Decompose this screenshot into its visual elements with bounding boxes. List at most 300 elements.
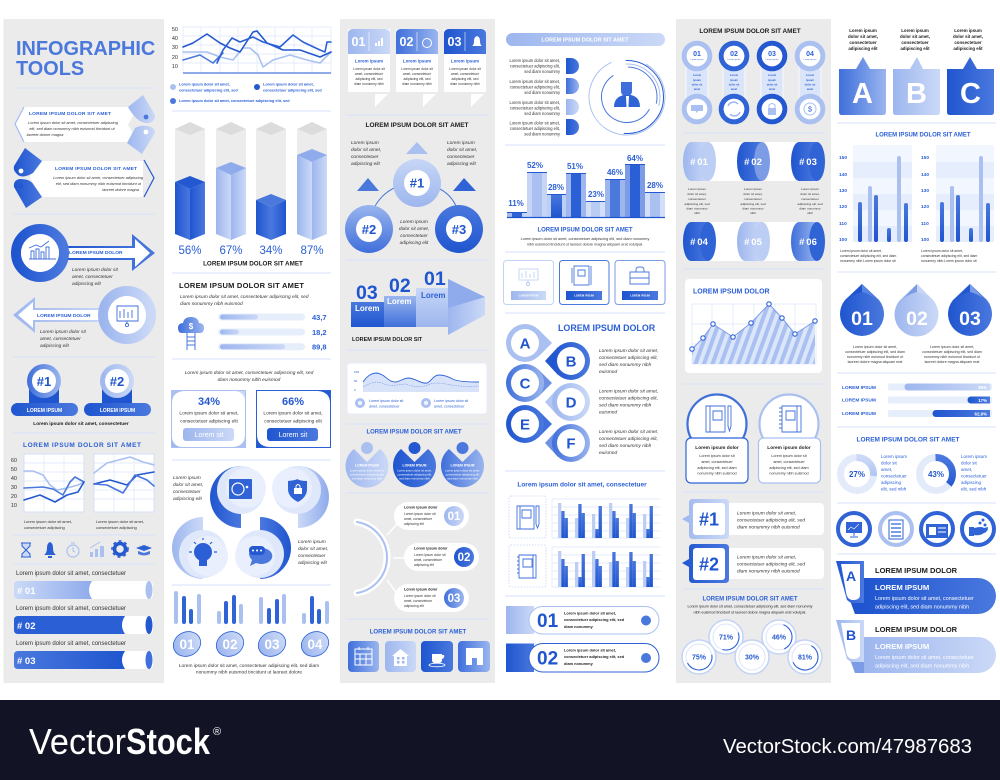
cylinder labels: consectetuer xyxy=(744,197,762,201)
lettered droplets: consectetuer adipiscing elit, xyxy=(599,396,658,402)
numbered note cards: Lorem ipsum dolor sit xyxy=(401,67,433,71)
cylinder labels: diam nonummy xyxy=(799,206,821,210)
badges #1 #2: Lorem ipsum dolor sit amet, consectetuer xyxy=(33,421,129,427)
progress bars: # 01 xyxy=(17,586,36,597)
donut charts: 43% xyxy=(928,470,944,479)
lettered droplets: F xyxy=(566,436,576,452)
arrow panel 2 with tags: Lorem ipsum dolor sit amet, consectetuer adipiscing xyxy=(53,175,144,180)
cylinder labels: nibh xyxy=(694,211,700,215)
lettered droplets: euismod xyxy=(599,369,617,375)
three icon boxes: LOREM IPSUM xyxy=(630,294,651,298)
stepped arrow: Lorem xyxy=(355,304,379,313)
title: INFOGRAPHIC xyxy=(16,38,155,60)
numbered note rows: consectetuer adipiscing elit, sed xyxy=(737,518,805,524)
panel: person arcs with text list: sed diam nonummy xyxy=(524,111,561,116)
ABC blocks: A xyxy=(852,78,873,110)
notched circles: Lorem ipsum dolor sit amet, xyxy=(350,468,384,472)
arc with three pills: adipiscing elit xyxy=(404,522,424,526)
notched circles: consectetuer adipiscing elit, xyxy=(397,472,432,476)
arc with three pills: Lorem ipsum dolor sit xyxy=(404,594,436,598)
notched circles: sed diam nonummy nibh xyxy=(352,476,383,480)
capsule pairs: dolor sit xyxy=(805,82,815,86)
numbered capsule rows: consectetuer adipiscing elit, sed xyxy=(564,654,625,659)
ribbon banner A: LOREM IPSUM xyxy=(875,583,929,592)
circle triad diagram: Lorem ipsum xyxy=(447,140,475,146)
panel: person arcs with text list: consectetuer adipiscing elit, xyxy=(510,64,560,68)
numbered note rows: #1 xyxy=(699,510,719,530)
double bar chart: 100 xyxy=(921,237,929,243)
progress bars: Lorem ipsum dolor sit amet, consectetuer xyxy=(16,571,126,577)
notebook domes: Lorem ipsum dolor xyxy=(695,445,739,451)
left line charts: Lorem ipsum dolor sit amet, xyxy=(96,519,144,524)
donut charts: elit, sed nibh xyxy=(881,486,907,492)
numbered note rows: Lorem ipsum dolor sit amet, xyxy=(737,554,796,560)
capsule pairs: $ xyxy=(808,106,812,114)
arrow panel 1 with tags: elit, sed diam nonummy nibh euismod tincidunt ut xyxy=(29,126,116,131)
3D bar chart xyxy=(175,122,327,268)
ABC blocks: adipiscing elit xyxy=(953,46,983,51)
icon row xyxy=(21,541,152,558)
numbered drops: consectetuer adipiscing elit, sed diam xyxy=(845,350,905,354)
icon tiles: LOREM IPSUM DOLOR SIT AMET xyxy=(370,628,467,636)
cylinder labels: # 03 xyxy=(799,157,817,168)
progress bars xyxy=(14,571,153,669)
numbered drops: nonummy nibh euismod tincidunt ut xyxy=(847,355,903,359)
bar groups with numbered ovals: Lorem ipsum dolor sit amet, consectetuer adipiscing elit, sed diam xyxy=(179,663,319,669)
capsule pairs: 01 xyxy=(693,51,701,58)
middle bar chart xyxy=(507,154,665,246)
numbered capsule rows: Lorem ipsum dolor sit amet, xyxy=(564,610,616,616)
lettered droplets: euismod xyxy=(599,410,617,416)
left line charts: 20 xyxy=(11,494,17,500)
panel: area chart card: 0 xyxy=(354,388,356,392)
horizontal percent bars: 62,9% xyxy=(975,412,987,416)
lettered droplets: E xyxy=(520,416,530,434)
capsule pairs: amet xyxy=(694,87,700,91)
left line charts: Lorem ipsum dolor sit amet, xyxy=(24,519,72,524)
lettered droplets: sed diam nonummy nibh xyxy=(599,402,652,408)
donut charts: dolor sit xyxy=(961,460,978,466)
double bar chart: consectetuer adipiscing elit, sed diam xyxy=(921,254,978,258)
top line chart: 40 xyxy=(172,36,178,42)
ribbon banner A: Lorem ipsum dolor sit amet, consectetuer xyxy=(875,596,974,602)
panel: two percent cards: consectetuer adipiscing elit xyxy=(180,418,238,424)
notched circles: Lorem ipsum dolor sit amet, xyxy=(397,468,432,472)
circle triad diagram: adipiscing elit xyxy=(400,240,429,246)
notched circles: consectetuer adipiscing elit, xyxy=(445,472,480,476)
title: TOOLS xyxy=(16,58,84,80)
double bar chart: 120 xyxy=(839,204,847,210)
badges #1 #2: #1 xyxy=(37,374,51,389)
capsule pairs: ipsum xyxy=(768,78,777,82)
numbered drops: 03 xyxy=(959,308,981,330)
arc with three pills: 02 xyxy=(458,552,470,564)
donut charts xyxy=(840,436,987,492)
percent rings: nibh euismod tincidunt ut laoreet dolore magna aliquam erat volutpat. xyxy=(694,610,806,614)
icon: safe xyxy=(229,479,252,499)
notched circles: sed diam nonummy nibh xyxy=(399,476,430,480)
notched circles xyxy=(345,430,484,488)
panel: person arcs with text list: Lorem ipsum dolor sit amet, xyxy=(509,58,560,63)
arrow graphic left with board icon: LOREM IPSUM DOLOR xyxy=(37,313,91,319)
numbered drops: laoreet dolore magna aliquam erat xyxy=(925,360,979,364)
notched circles: sed diam nonummy nibh xyxy=(447,476,478,480)
arrow graphic right with chart icon: adipiscing elit xyxy=(72,281,101,287)
capsule pairs: Lorem xyxy=(693,73,702,77)
icon: light bulb xyxy=(189,538,217,566)
lettered droplets: B xyxy=(566,354,577,370)
title xyxy=(16,38,155,80)
notebook domes: Lorem ipsum dolor xyxy=(767,445,811,451)
numbered note cards: adipiscing elit, sed xyxy=(404,77,431,81)
notebook domes: amet, consectetuer xyxy=(701,460,733,464)
donut charts: consectetuer xyxy=(881,474,907,478)
circle triad diagram: #2 xyxy=(362,222,376,237)
notebook bar charts xyxy=(509,482,660,587)
numbered note cards: amet, consectetuer xyxy=(355,72,384,76)
middle bar chart: LOREM IPSUM DOLOR SIT AMET xyxy=(537,228,633,234)
double bar chart: nonummy nibh.Lorem ipsum dolor sit xyxy=(840,259,896,263)
capsule pairs: ipsum xyxy=(730,78,739,82)
panel: area chart card: 50 xyxy=(354,379,358,383)
ABC blocks: C xyxy=(960,78,981,110)
lettered droplets: sed diam nonummy nibh xyxy=(599,443,652,449)
numbered note rows: diam nonummy nibh euismod xyxy=(737,568,800,574)
panel: four crescent circles: Lorem ipsum xyxy=(173,475,201,481)
cylinder labels: # 02 xyxy=(744,157,762,168)
ribbon banner A xyxy=(836,561,996,614)
panel: two percent cards: Lorem ipsum dolor sit amet, xyxy=(263,410,323,416)
circle triad diagram: consectetuer xyxy=(400,233,428,239)
3D bar chart: 56% xyxy=(178,245,202,257)
arrow panel 1 with tags xyxy=(15,95,155,154)
panel: four crescent circles: consectetuer xyxy=(298,553,326,559)
horizontal percent bars xyxy=(842,384,992,417)
ribbon banner A: adipiscing elit, sed diam nonummy nibh xyxy=(875,604,969,610)
bar groups with numbered ovals: 01 xyxy=(179,637,195,652)
capsule pairs: ipsum xyxy=(693,78,702,82)
donut charts: dolor sit xyxy=(881,460,898,466)
ribbon banner B: adipiscing elit, sed diam nonummy nibh xyxy=(875,664,969,670)
percent rings: LOREM IPSUM DOLOR SIT AMET xyxy=(702,596,798,602)
panel: two percent cards: Lorem ipsum dolor sit amet, xyxy=(179,410,239,416)
circle triad diagram: #1 xyxy=(410,176,424,190)
arc with three pills: Lorem ipsum dolor xyxy=(404,588,438,592)
numbered note cards: Lorem ipsum xyxy=(403,58,431,64)
double bar chart: 110 xyxy=(921,221,929,227)
double bar chart: 140 xyxy=(839,172,847,178)
capsule pairs: dolor sit xyxy=(692,82,702,86)
capsule pairs: 02 xyxy=(730,51,738,58)
numbered drops: 02 xyxy=(906,308,928,330)
arc with three pills: 01 xyxy=(448,511,461,523)
middle bar chart: 11% xyxy=(508,199,524,208)
double bar chart: 100 xyxy=(839,237,847,243)
numbered note rows: consectetuer adipiscing elit, sed xyxy=(737,562,805,568)
numbered drops: Lorem ipsum dolor sit amet, xyxy=(853,345,897,349)
numbered capsule rows: diam nonummy xyxy=(564,661,594,666)
percent rings: 46% xyxy=(772,634,787,642)
cylinder labels: diam nonummy xyxy=(742,206,764,210)
arrow panel 2 with tags: elit, sed diam nonummy nibh euismod tincidunt ut xyxy=(56,181,142,186)
panel: area chart card xyxy=(347,363,487,414)
notebook domes xyxy=(686,394,820,483)
percent rings: 81% xyxy=(798,654,813,662)
heading pill: LOREM IPSUM DOLOR SIT AMET xyxy=(541,38,629,44)
progress bars: # 03 xyxy=(17,656,36,667)
double bar chart: consectetuer adipiscing elit, sed diam xyxy=(840,254,897,258)
panel: area chart card: amet, consectetuer xyxy=(434,404,465,408)
middle bar chart: 28% xyxy=(548,183,564,192)
three icon boxes xyxy=(504,260,665,304)
left line charts: consectetuer adipiscing xyxy=(96,525,137,530)
notebook domes: Lorem ipsum dolor sit xyxy=(771,454,807,458)
progress bars: # 02 xyxy=(17,621,36,632)
donut charts: adipiscing xyxy=(961,480,982,485)
capsule pairs: Lorem ipsum xyxy=(804,58,816,61)
arc with three pills: amet, consectetuer xyxy=(404,599,433,603)
arc with three pills: adipiscing elit xyxy=(404,604,424,608)
icon: cloud with ladder xyxy=(178,317,204,350)
capsule pairs: dolor sit xyxy=(767,82,777,86)
percent rings xyxy=(682,596,823,675)
lettered droplets: Lorem ipsum dolor sit amet, xyxy=(599,429,658,435)
circle triad diagram: Lorem ipsum xyxy=(400,219,428,225)
stepped arrow: Lorem xyxy=(421,291,445,300)
numbered note rows: #2 xyxy=(699,554,719,574)
arc with three pills: Lorem ipsum dolor xyxy=(404,506,438,510)
arrow graphic right with chart icon: amet, consectetuer xyxy=(72,274,113,280)
numbered note cards: Lorem ipsum dolor sit xyxy=(353,67,385,71)
notched circles: LOREM IPSUM xyxy=(451,464,475,468)
footer watermark bar: VectorStock.com/47987683 xyxy=(723,736,972,758)
double bar chart: nonummy nibh.Lorem ipsum dolor sit xyxy=(921,259,977,263)
left line charts: consectetuer adipiscing xyxy=(24,525,65,530)
horizontal percent bars: LOREM IPSUM xyxy=(842,411,876,417)
notebook domes: Lorem ipsum dolor sit xyxy=(699,454,735,458)
footer watermark bar: Vector xyxy=(29,721,126,762)
donut charts: 27% xyxy=(849,470,865,479)
ribbon banner B xyxy=(836,620,996,673)
panel: four crescent circles xyxy=(172,466,329,579)
panel: hatched area chart xyxy=(685,279,822,373)
cylinder labels: dolor sit amet, xyxy=(687,192,707,196)
top line chart: 50 xyxy=(172,27,178,33)
panel: cloud progress: 43,7 xyxy=(312,313,327,322)
panel: person arcs with text list: sed diam nonummy xyxy=(524,90,561,95)
top line chart: Lorem ipsum dolor sit amet, consectetuer adipiscing elit, sed xyxy=(179,99,290,103)
numbered drops: nonummy nibh euismod tincidunt ut xyxy=(924,355,980,359)
panel: area chart card: 100 xyxy=(354,370,359,374)
icon: cloud with ladder: $ xyxy=(189,322,194,331)
capsule pairs: ipsum xyxy=(806,78,815,82)
left line charts: 50 xyxy=(11,467,17,473)
arrow panel 1 with tags: laoreet dolore magna xyxy=(27,132,64,137)
lettered droplets: consectetuer adipiscing elit, xyxy=(599,355,658,361)
lettered droplets: A xyxy=(520,336,531,352)
cylinder labels: consectetuer xyxy=(688,197,706,201)
numbered note cards: Lorem ipsum xyxy=(355,58,383,64)
numbered capsule rows: 02 xyxy=(537,648,558,670)
capsule pairs xyxy=(684,28,823,122)
numbered note cards: amet, consectetuer xyxy=(451,72,480,76)
arrow panel 2 with tags: laoreet dolore magna xyxy=(102,187,140,192)
top line chart: 20 xyxy=(172,55,178,61)
circle triad diagram: dolor sit amet, xyxy=(399,226,429,232)
top line chart: Lorem ipsum dolor sit amet, xyxy=(179,82,230,86)
left line charts: 60 xyxy=(11,458,17,464)
bar groups with numbered ovals: nonummy nibh euismod tincidunt ut laoreet dolore xyxy=(196,670,302,676)
notched circles: LOREM IPSUM xyxy=(403,464,427,468)
lettered droplets: consectetuer adipiscing elit, xyxy=(599,436,658,442)
cylinder labels: adipiscing elit, sed xyxy=(740,202,766,206)
middle bar chart: 64% xyxy=(627,154,643,163)
icon: person xyxy=(614,82,640,107)
3D bar chart: 34% xyxy=(259,245,283,257)
cylinder labels: Lorem ipsum xyxy=(744,187,762,191)
ABC blocks: Lorem ipsum xyxy=(954,28,982,33)
bar groups with numbered ovals: 03 xyxy=(264,637,280,652)
panel: four crescent circles: adipiscing elit xyxy=(173,496,202,502)
panel: cloud progress xyxy=(178,281,327,352)
lettered droplets: C xyxy=(520,376,531,392)
cylinder labels: # 01 xyxy=(690,157,709,168)
panel: person arcs with text list: Lorem ipsum dolor sit amet, xyxy=(509,100,560,105)
numbered note rows xyxy=(682,499,824,583)
cylinder labels: adipiscing elit, sed xyxy=(684,202,710,206)
numbered note cards: adipiscing elit, sed xyxy=(452,77,479,81)
capsule pairs: 03 xyxy=(768,51,776,58)
icon: chat bubbles xyxy=(249,546,272,566)
ribbon banner A: LOREM IPSUM DOLOR xyxy=(875,566,958,575)
panel: person arcs with text list: consectetuer adipiscing elit, xyxy=(510,106,560,110)
bar groups with numbered ovals: 02 xyxy=(222,637,238,652)
ABC blocks: Lorem ipsum xyxy=(849,28,877,33)
middle bar chart: 52% xyxy=(527,161,543,170)
lettered droplets: D xyxy=(566,394,577,412)
circle triad diagram: consectetuer xyxy=(351,154,379,160)
double bar chart xyxy=(839,132,994,263)
panel: two percent cards: 66% xyxy=(282,396,304,408)
circle triad diagram: #3 xyxy=(452,222,466,237)
3D bar chart: LOREM IPSUM DOLOR SIT AMET xyxy=(203,260,303,268)
ABC blocks: Lorem ipsum xyxy=(901,28,929,33)
stepped arrow: LOREM IPSUM DOLOR SIT xyxy=(352,337,423,343)
numbered note cards: 01 xyxy=(352,35,365,49)
notebook domes: nonummy nibh euismod xyxy=(697,472,737,476)
middle bar chart: nibh euismod tincidunt ut laoreet dolore magna aliquam erat volutpat. xyxy=(527,242,643,246)
top line chart: consectetuer adipiscing elit, sed xyxy=(179,88,238,92)
arc with three pills: Lorem ipsum dolor sit xyxy=(404,512,436,516)
ABC blocks: consectetuer xyxy=(849,40,877,45)
panel: four crescent circles: consectetuer xyxy=(173,489,201,495)
panel: person arcs with text list: Lorem ipsum dolor sit amet, xyxy=(509,79,560,84)
circle triad diagram: adipiscing elit xyxy=(351,161,380,167)
ABC blocks: dolor sit amet, xyxy=(900,34,930,39)
three icon boxes: LOREM IPSUM xyxy=(574,294,595,298)
ABC blocks: dolor sit amet, xyxy=(848,34,878,39)
double bar chart: 120 xyxy=(921,204,929,210)
lettered droplets: LOREM IPSUM DOLOR xyxy=(558,323,656,333)
ABC blocks: adipiscing elit xyxy=(848,46,878,51)
arrow graphic left with board icon: Lorem ipsum dolor sit xyxy=(40,329,87,335)
notched circles: consectetuer adipiscing elit, xyxy=(350,472,384,476)
donut charts: adipiscing xyxy=(881,480,902,485)
panel: cloud progress: diam nonummy nibh euismod xyxy=(180,301,243,307)
cylinder labels: nibh xyxy=(750,211,756,215)
middle bar chart: 23% xyxy=(588,190,604,199)
left line charts: 30 xyxy=(11,485,17,491)
panel: two percent cards: Lorem sit xyxy=(279,432,307,439)
notebook domes: nonummy nibh euismod xyxy=(769,472,809,476)
ribbon banner B: B xyxy=(846,627,856,643)
lettered droplets: Lorem ipsum dolor sit amet, xyxy=(599,388,658,394)
capsule pairs: Lorem xyxy=(806,73,815,77)
notebook domes: adipiscing elit, sed diam xyxy=(697,466,737,470)
ABC blocks: B xyxy=(906,78,927,110)
arrow graphic right with chart icon xyxy=(16,229,155,287)
donut charts: amet, xyxy=(961,467,972,472)
cylinder labels: diam nonummy xyxy=(686,206,708,210)
stepped arrow: 03 xyxy=(356,282,378,304)
donut charts: elit, sed nibh xyxy=(961,486,987,492)
capsule pairs: LOREM IPSUM DOLOR SIT AMET xyxy=(699,28,801,35)
circle triad diagram: dolor sit amet, xyxy=(447,147,477,153)
panel: two percent cards: consectetuer adipiscing elit xyxy=(264,418,322,424)
panel: cloud progress: Lorem ipsum dolor sit amet, consectetuer adipiscing elit, sed xyxy=(180,294,309,300)
panel: two percent cards: 34% xyxy=(198,396,220,408)
panel: cloud progress: 89,8 xyxy=(312,342,327,352)
badges #1 #2: #2 xyxy=(110,374,124,389)
left line charts: 40 xyxy=(11,476,17,482)
circle triad diagram: dolor sit amet, xyxy=(351,147,381,153)
stepped arrow: Lorem xyxy=(387,297,411,306)
bar groups with numbered ovals xyxy=(169,591,333,676)
middle bar chart: 51% xyxy=(567,162,583,171)
numbered drops: 01 xyxy=(851,308,873,330)
capsule pairs: 04 xyxy=(806,51,814,58)
arc with three pills xyxy=(357,502,479,612)
top line chart: consectetuer adipiscing elit, sed xyxy=(263,88,322,92)
numbered note cards: 02 xyxy=(400,35,413,49)
double bar chart: 150 xyxy=(839,155,847,161)
footer watermark bar xyxy=(0,700,1000,780)
notebook domes: amet, consectetuer xyxy=(773,460,805,464)
numbered note cards xyxy=(348,29,486,107)
numbered note cards: amet, consectetuer xyxy=(403,72,432,76)
arrow graphic left with board icon xyxy=(13,291,151,349)
badges #1 #2: LOREM IPSUM xyxy=(100,408,135,414)
numbered note rows: Lorem ipsum dolor sit amet, xyxy=(737,510,796,516)
notched circles: LOREM IPSUM xyxy=(355,464,379,468)
panel: cloud progress: 18,2 xyxy=(312,328,327,337)
ABC blocks: adipiscing elit xyxy=(900,46,930,51)
top line chart: 10 xyxy=(172,64,178,70)
panel: four crescent circles: adipiscing elit xyxy=(298,560,327,566)
arc with three pills: Lorem ipsum dolor sit xyxy=(414,553,446,557)
cylinder labels: # 04 xyxy=(690,237,709,248)
double bar chart: 140 xyxy=(921,172,929,178)
notebook domes: adipiscing elit, sed diam xyxy=(769,466,809,470)
horizontal percent bars: 85% xyxy=(978,385,987,390)
cylinder labels: consectetuer xyxy=(801,197,819,201)
capsule pairs: Lorem ipsum xyxy=(766,58,778,61)
capsule pairs: amet xyxy=(731,87,737,91)
arrow panel 1 with tags: LOREM IPSUM DOLOR SIT AMET xyxy=(29,111,111,117)
donut charts: amet, xyxy=(881,467,892,472)
ABC blocks xyxy=(839,28,994,115)
capsule pairs: Lorem ipsum xyxy=(691,58,703,61)
